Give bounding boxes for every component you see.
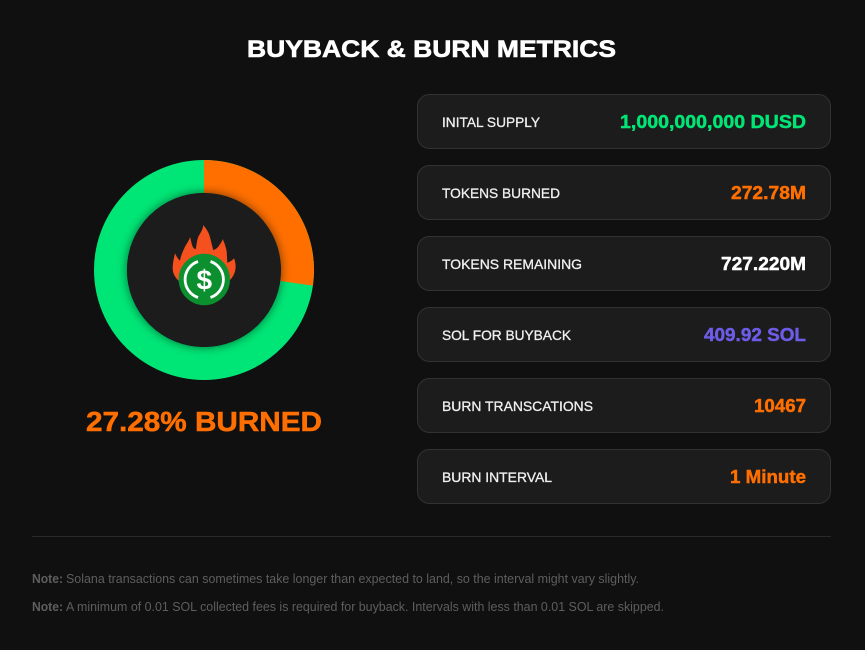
burned percentage: 27.28% BURNED bbox=[86, 406, 322, 437]
panel: tokens burned bbox=[418, 166, 830, 220]
icon: flame bbox=[173, 225, 236, 286]
panel: initial supply: INITAL SUPPLY bbox=[442, 114, 541, 130]
panel: initial supply bbox=[418, 94, 830, 148]
note: minimum fees: A minimum of 0.01 SOL collected fees is required for buyback. Intervals with less than 0.01 SOL are skipped. bbox=[66, 600, 664, 614]
icon: dollar sign: $ bbox=[197, 264, 213, 296]
icon: coin disc bbox=[179, 254, 230, 305]
panel: tokens burned: 272.78M bbox=[731, 182, 806, 203]
panel: tokens burned: TOKENS BURNED bbox=[442, 185, 560, 201]
panel: donut chart bbox=[110, 176, 298, 364]
panel: tokens remaining: 727.220M bbox=[721, 253, 806, 274]
donut centre bbox=[127, 193, 281, 347]
donut segment: orange burned bbox=[204, 176, 298, 283]
panel: burn interval bbox=[418, 450, 830, 504]
icon: flaming dollar coin bbox=[173, 225, 236, 305]
panel: burn transactions bbox=[418, 378, 830, 432]
note: transaction timing: Solana transactions can sometimes take longer than expected to land, so the interval might vary slightly. bbox=[66, 572, 639, 586]
panel: burn interval: BURN INTERVAL bbox=[442, 469, 552, 485]
panel: tokens remaining: TOKENS REMAINING bbox=[442, 256, 582, 272]
note: transaction timing: Note: bbox=[32, 572, 63, 586]
panel: sol for buyback bbox=[418, 308, 830, 362]
note: minimum fees: Note: bbox=[32, 600, 63, 614]
panel: burn interval: 1 Minute bbox=[730, 466, 806, 487]
panel: burn transactions: 10467 bbox=[754, 395, 806, 416]
title: BUYBACK & BURN METRICS bbox=[247, 36, 616, 63]
panel: tokens remaining bbox=[418, 236, 830, 290]
donut ring: green remaining bbox=[110, 176, 298, 364]
icon: coin arcs bbox=[185, 262, 223, 298]
panel: initial supply: 1,000,000,000 DUSD bbox=[620, 111, 806, 132]
panel: sol for buyback: 409.92 SOL bbox=[704, 324, 806, 345]
panel: sol for buyback: SOL FOR BUYBACK bbox=[442, 327, 572, 343]
panel: burn transactions: BURN TRANSCATIONS bbox=[442, 398, 593, 414]
